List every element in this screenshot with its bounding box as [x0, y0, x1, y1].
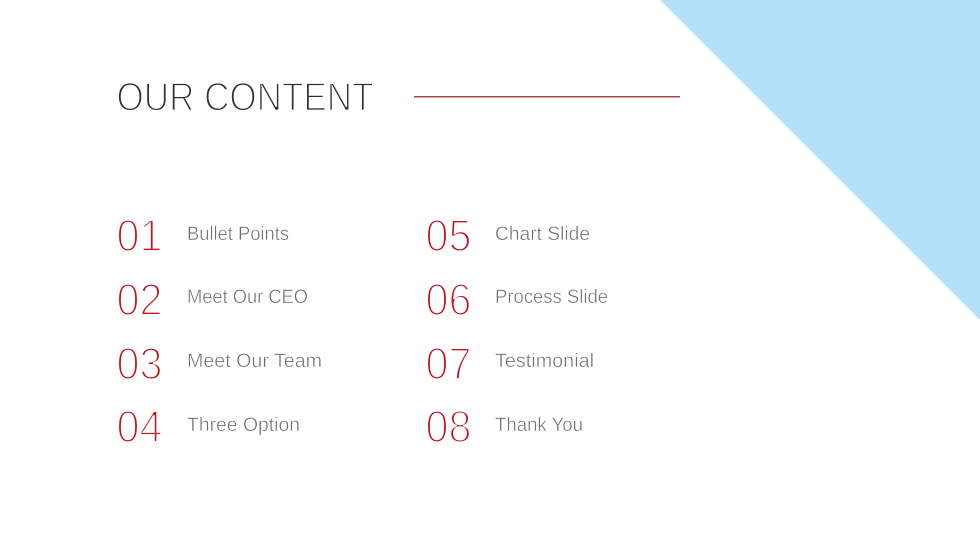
number 05: 05 — [426, 210, 472, 261]
blue triangle — [660, 0, 980, 320]
label 05: Chart Slide — [495, 223, 590, 245]
item 01 — [116, 210, 289, 261]
number 07: 07 — [426, 338, 472, 389]
item 08 — [426, 401, 583, 452]
number 04: 04 — [116, 401, 162, 452]
label 07: Testimonial — [495, 350, 594, 372]
number 01: 01 — [116, 210, 162, 261]
label 02: Meet Our CEO — [187, 286, 308, 308]
label 04: Three Option — [187, 414, 300, 436]
number 02: 02 — [116, 274, 162, 325]
item 04 — [116, 401, 300, 452]
number 08: 08 — [426, 401, 472, 452]
item 07 — [426, 338, 594, 389]
label 01: Bullet Points — [187, 223, 289, 245]
label 06: Process Slide — [495, 286, 608, 308]
title rule — [414, 96, 680, 98]
label 03: Meet Our Team — [187, 350, 322, 372]
number 06: 06 — [426, 274, 472, 325]
number 03: 03 — [116, 338, 162, 389]
item 03 — [116, 338, 322, 389]
item 06 — [426, 274, 608, 325]
item 05 — [426, 210, 590, 261]
label 08: Thank You — [495, 414, 583, 436]
title: OUR CONTENT — [116, 76, 374, 120]
item 02 — [116, 274, 308, 325]
